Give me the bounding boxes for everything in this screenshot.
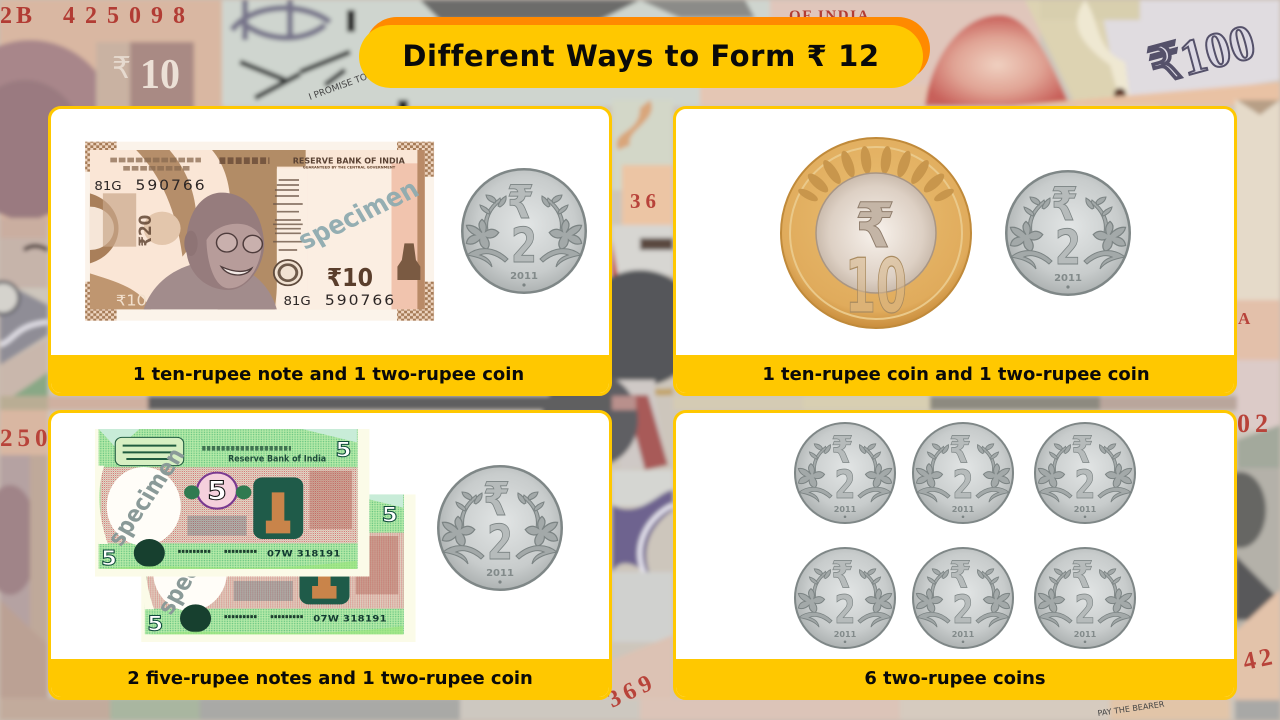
coin 2 — [912, 422, 1014, 524]
two-rupee coin: ₹ — [483, 472, 510, 526]
coin 5: ₹ — [949, 552, 971, 596]
caption: 6 two-rupee coins — [864, 668, 1046, 689]
back five-rupee note: 5 — [382, 504, 398, 527]
coin 3 — [1034, 422, 1136, 524]
coin 6: 2 — [1074, 588, 1096, 633]
coin 4: 2 — [834, 588, 856, 633]
coin 2: 2011 — [952, 504, 975, 514]
two-rupee coin: 2011 — [486, 568, 514, 579]
coin 1: 2 — [834, 463, 856, 508]
front five-rupee note: Reserve Bank of India — [228, 455, 326, 465]
background note fragments: 369 — [604, 668, 661, 713]
coin 4 — [794, 547, 896, 649]
background note fragments: PAY THE BEARER — [1097, 700, 1165, 718]
coin 2: 2 — [952, 463, 974, 508]
panel: 6 two-rupee coins — [673, 410, 1237, 700]
back five-rupee note — [141, 494, 416, 642]
ten-rupee note: 590766 — [325, 293, 394, 309]
coin 4: ₹ — [831, 552, 853, 596]
front five-rupee note — [95, 429, 369, 577]
five-rupee notes — [95, 429, 416, 642]
ten-rupee coin: ₹ — [855, 189, 895, 262]
coin 4: 2011 — [834, 629, 857, 639]
coin 5 — [912, 547, 1014, 649]
panel: 2 five-rupee notes and 1 two-rupee coin — [48, 410, 612, 700]
background note fragments: ₹100 — [1143, 13, 1261, 95]
background note fragments: ₹ — [112, 51, 131, 86]
back five-rupee note: 07W 318191 — [313, 614, 387, 625]
caption — [51, 355, 609, 393]
coin 1: ₹ — [831, 427, 853, 471]
background note fragments: 42 — [1241, 643, 1279, 676]
two-rupee coin: ₹ — [507, 175, 534, 229]
background note fragments: 02 — [1237, 409, 1273, 438]
coin 3: 2 — [1074, 463, 1096, 508]
background note fragments: A — [1238, 309, 1251, 328]
coin 3: ₹ — [1071, 427, 1093, 471]
ten-rupee note: ₹20 — [135, 215, 155, 247]
background note fragments: 10 — [140, 52, 180, 98]
ten-rupee note: ₹10 — [116, 292, 147, 309]
front five-rupee note: 5 — [336, 438, 352, 462]
ten-rupee note: 81G — [94, 179, 122, 193]
background note fragments: 250 — [0, 425, 52, 452]
ten-rupee note: 81G — [283, 294, 311, 308]
two-rupee coin — [1005, 170, 1131, 296]
two-rupee coin: 2 — [487, 515, 513, 571]
front five-rupee note: specimen — [102, 444, 191, 550]
coin 6: ₹ — [1071, 552, 1093, 596]
two-rupee coin: 2 — [1055, 220, 1081, 276]
caption — [676, 659, 1234, 697]
caption — [676, 355, 1234, 393]
caption: 1 ten-rupee note and 1 two-rupee coin — [133, 364, 524, 385]
coin 2: ₹ — [949, 427, 971, 471]
back five-rupee note: 5 — [147, 612, 163, 636]
ten-rupee note: specimen — [293, 174, 424, 256]
panel: 1 ten-rupee coin and 1 two-rupee coin — [673, 106, 1237, 396]
coin 6 — [1034, 547, 1136, 649]
background note fragments: 36 — [630, 189, 661, 213]
ten-rupee note: RESERVE BANK OF INDIA — [293, 157, 405, 166]
ten-rupee note: ₹10 — [327, 264, 373, 293]
caption — [51, 659, 609, 697]
title banner — [359, 17, 930, 88]
caption: 2 five-rupee notes and 1 two-rupee coin — [127, 668, 533, 689]
coin 5: 2011 — [952, 629, 975, 639]
background note fragments: OF INDIA — [789, 8, 870, 24]
background note fragments: 425098 — [63, 3, 195, 29]
background note fragments: I PROMISE TO — [308, 72, 369, 103]
front five-rupee note: 5 — [207, 477, 227, 506]
front five-rupee note: 5 — [101, 547, 117, 571]
coin 1 — [794, 422, 896, 524]
coin 6: 2011 — [1074, 629, 1097, 639]
title banner: Different Ways to Form ₹ 12 — [402, 39, 880, 73]
ten-rupee coin: 10 — [845, 242, 907, 330]
panel: 1 ten-rupee note and 1 two-rupee coin — [48, 106, 612, 396]
two-rupee coin: 2 — [511, 218, 537, 274]
coin 3: 2011 — [1074, 504, 1097, 514]
coin 5: 2 — [952, 588, 974, 633]
ten-rupee note: 590766 — [135, 178, 205, 194]
two-rupee coin — [437, 465, 563, 591]
two-rupee coin — [461, 168, 587, 294]
front five-rupee note: 07W 318191 — [267, 549, 341, 559]
back five-rupee note: specimen — [152, 511, 237, 619]
two-rupee coin: ₹ — [1051, 177, 1078, 231]
background note fragments: 2B — [0, 3, 36, 29]
ten-rupee coin — [781, 138, 971, 330]
coin 1: 2011 — [834, 504, 857, 514]
ten-rupee note: GUARANTEED BY THE CENTRAL GOVERNMENT — [303, 166, 396, 170]
two-rupee coin: 2011 — [510, 271, 538, 282]
ten-rupee note — [85, 142, 434, 321]
two-rupee coin: 2011 — [1054, 273, 1082, 284]
caption: 1 ten-rupee coin and 1 two-rupee coin — [762, 364, 1150, 385]
